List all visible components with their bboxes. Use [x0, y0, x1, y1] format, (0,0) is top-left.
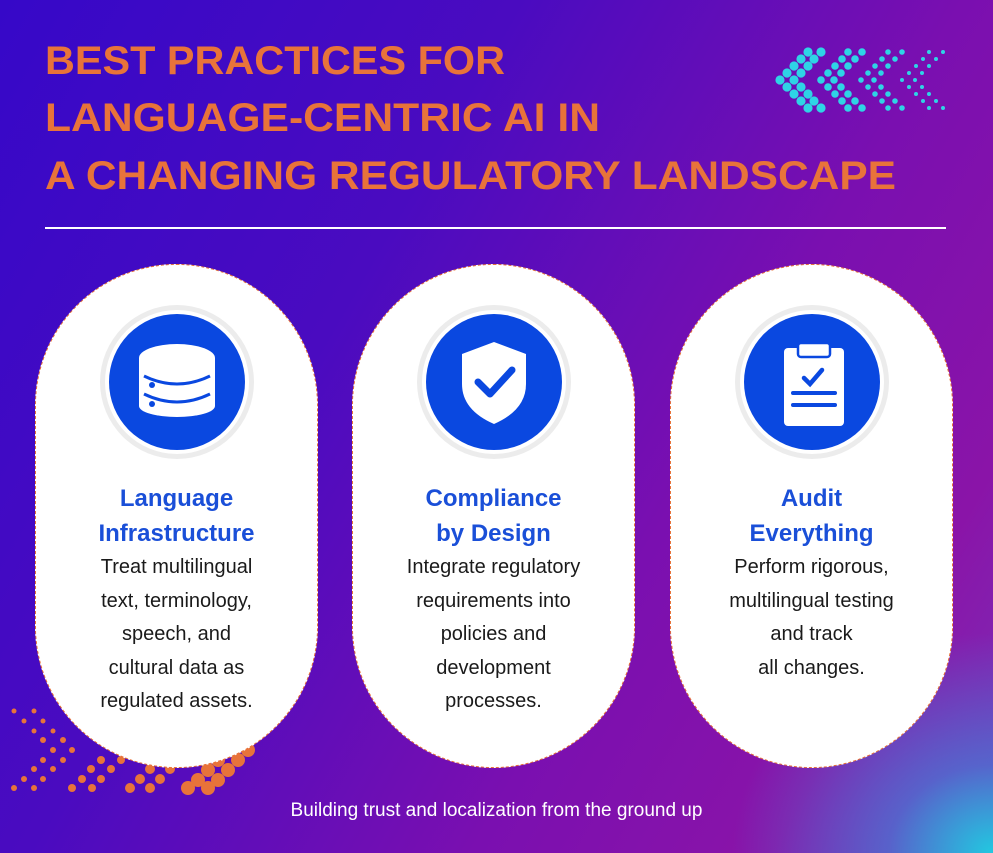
heading	[425, 485, 562, 547]
text: and track	[770, 623, 853, 645]
heading: Audit	[781, 485, 842, 512]
text: Perform rigorous,	[734, 556, 889, 578]
title: LANGUAGE-CENTRIC AI IN	[45, 96, 600, 140]
text: processes.	[445, 690, 542, 712]
text: all changes.	[758, 656, 865, 678]
heading	[749, 485, 874, 547]
panel: audit everything	[670, 264, 953, 768]
panel: language infrastructure	[35, 264, 318, 768]
text: policies and	[441, 623, 546, 645]
heading: Everything	[749, 520, 874, 547]
decoration: chevron dots	[775, 47, 945, 113]
icon: shield	[417, 305, 571, 459]
heading: by Design	[436, 520, 551, 547]
icon: database	[100, 305, 254, 459]
text	[407, 556, 580, 712]
text: multilingual testing	[729, 590, 894, 612]
text: cultural data as	[109, 656, 244, 678]
text: development	[436, 656, 551, 678]
text	[729, 556, 894, 678]
text: regulated assets.	[100, 690, 253, 712]
icon: clipboard	[735, 305, 889, 459]
text: speech, and	[122, 623, 231, 645]
text: Treat multilingual	[101, 556, 252, 578]
heading	[98, 485, 255, 547]
footer text: Building trust and localization from the ground up	[291, 800, 702, 821]
title	[45, 39, 946, 229]
text	[100, 556, 253, 712]
text: text, terminology,	[101, 590, 252, 612]
panel: compliance by design	[352, 264, 635, 768]
text: requirements into	[416, 590, 571, 612]
decoration: orange dots	[11, 708, 255, 795]
text: Integrate regulatory	[407, 556, 580, 578]
heading: Infrastructure	[98, 520, 255, 547]
heading: Compliance	[425, 485, 562, 512]
heading: Language	[120, 485, 233, 512]
title: A CHANGING REGULATORY LANDSCAPE	[45, 154, 896, 198]
title: BEST PRACTICES FOR	[45, 39, 505, 83]
